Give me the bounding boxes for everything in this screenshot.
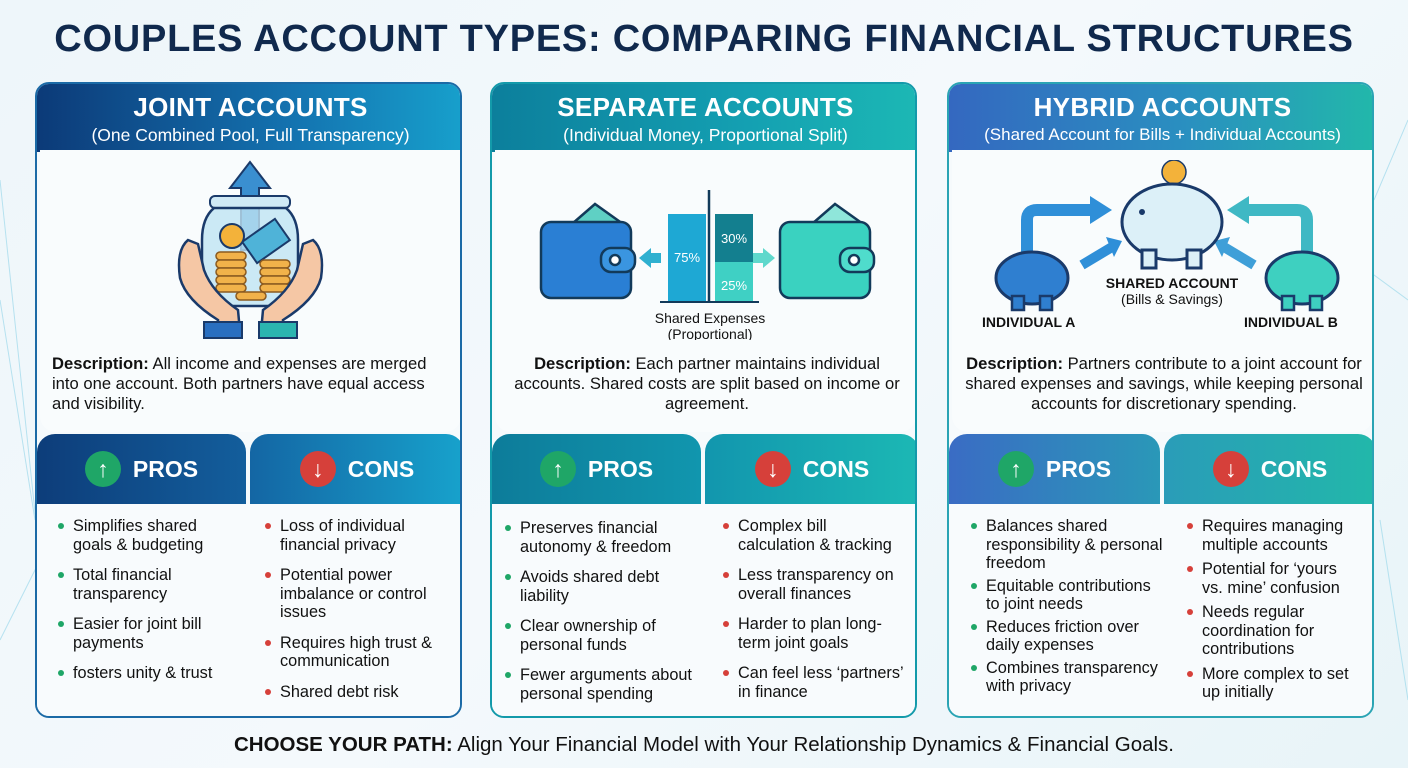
label: individual a: INDIVIDUAL A: [982, 314, 1075, 330]
list: separate cons: Harder to plan long-term joint goals: [738, 615, 882, 652]
list: joint pros: Simplifies shared goals & budgeting: [73, 517, 203, 554]
list: joint pros: [58, 517, 212, 682]
icon: jar with hands: [178, 160, 324, 339]
tab: hybrid pros: PROS: [1046, 456, 1111, 482]
list: separate cons: Can feel less ‘partners’ in finance: [738, 664, 903, 700]
diagram: piggy banks: SHARED ACCOUNT: [1106, 275, 1239, 291]
label: individual b: INDIVIDUAL B: [1244, 314, 1338, 330]
tab: separate cons: CONS: [803, 456, 869, 482]
tab: hybrid cons: CONS: [1261, 456, 1327, 482]
header: separate: (Individual Money, Proportional Split): [563, 125, 848, 145]
list: separate cons: [723, 517, 903, 700]
list: separate cons: Complex bill calculation & tracking: [738, 517, 892, 554]
list: separate cons: Less transparency on overall finances: [738, 566, 894, 602]
list: joint cons: [265, 517, 432, 700]
tab: joint cons: [250, 434, 464, 504]
header: joint: JOINT ACCOUNTS: [133, 92, 368, 122]
title: COUPLES ACCOUNT TYPES: COMPARING FINANCIAL STRUCTURES: [54, 18, 1354, 60]
list: joint pros: fosters unity & trust: [73, 664, 212, 682]
list: joint cons: Shared debt risk: [280, 682, 399, 700]
chart: wallets and proportional split: Shared Expenses: [655, 310, 765, 326]
description: hybrid: Description: Partners contribute to a joint account for shared expenses and savings, while keeping personal accounts for discretionary spending.: [965, 354, 1363, 413]
tab: separate cons: ↓: [767, 456, 779, 482]
list: joint cons: Loss of individual financial privacy: [280, 517, 405, 554]
header: separate: [492, 84, 919, 152]
description: separate: Description: Each partner maintains individual accounts. Shared costs are split based on income or agreement.: [514, 354, 900, 413]
list: separate pros: Preserves financial autonomy & freedom: [520, 519, 671, 556]
tab: joint cons: ↓: [312, 456, 324, 482]
chart: wallets and proportional split: 75%: [674, 250, 700, 265]
list: hybrid cons: Needs regular coordination for contributions: [1202, 603, 1314, 658]
diagram: piggy banks: [994, 160, 1340, 312]
diagram: piggy banks: (Bills & Savings): [1121, 291, 1223, 307]
list: separate pros: Avoids shared debt liability: [520, 568, 659, 604]
tab: hybrid pros: ↑: [1010, 456, 1022, 482]
header: joint: (One Combined Pool, Full Transparency): [91, 125, 410, 145]
header: hybrid: HYBRID ACCOUNTS: [1034, 92, 1291, 122]
list: hybrid cons: More complex to set up initially: [1202, 664, 1349, 701]
header: hybrid: [949, 84, 1376, 152]
tab: joint pros: ↑: [97, 456, 109, 482]
list: separate pros: Clear ownership of personal funds: [520, 617, 656, 654]
footer: CHOOSE YOUR PATH: Align Your Financial Model with Your Relationship Dynamics & Financial Goals.: [234, 733, 1174, 756]
chart: wallets and proportional split: 30%: [721, 231, 747, 246]
panel: joint accounts: [35, 82, 462, 718]
header: hybrid: (Shared Account for Bills + Individual Accounts): [984, 125, 1341, 144]
panel: separate accounts: [490, 82, 917, 718]
list: hybrid pros: Balances shared responsibility & personal freedom: [986, 517, 1162, 572]
list: joint cons: Requires high trust & communication: [280, 634, 432, 670]
tab: separate pros: [492, 434, 701, 504]
list: joint pros: Total financial transparency: [73, 566, 172, 602]
tab: hybrid cons: ↓: [1225, 456, 1237, 482]
list: hybrid cons: Requires managing multiple accounts: [1202, 517, 1343, 554]
tab: separate pros: PROS: [588, 456, 653, 482]
list: hybrid pros: Equitable contributions to joint needs: [986, 576, 1151, 613]
list: hybrid pros: [971, 517, 1162, 695]
tab: separate pros: ↑: [552, 456, 564, 482]
header: separate: SEPARATE ACCOUNTS: [557, 92, 854, 122]
list: joint pros: Easier for joint bill payments: [73, 615, 202, 652]
list: hybrid cons: Potential for ‘yours vs. mine’ confusion: [1202, 560, 1340, 596]
list: hybrid cons: [1187, 517, 1349, 701]
description: joint: Description: All income and expenses are merged into one account. Both partners have equal access and visibility.: [52, 354, 426, 413]
header: joint: [37, 84, 464, 152]
chart: wallets and proportional split: 25%: [721, 278, 747, 293]
tab: separate cons: [705, 434, 919, 504]
tab: hybrid cons: [1164, 434, 1376, 504]
list: hybrid pros: Reduces friction over daily expenses: [986, 618, 1139, 654]
tab: joint pros: PROS: [133, 456, 198, 482]
tab: joint pros: [37, 434, 246, 504]
panel: hybrid accounts: [947, 82, 1374, 718]
chart: wallets and proportional split: [540, 190, 876, 340]
list: joint cons: Potential power imbalance or control issues: [280, 566, 427, 621]
list: separate pros: [505, 519, 692, 702]
tab: joint cons: CONS: [348, 456, 414, 482]
list: separate pros: Fewer arguments about personal spending: [520, 666, 692, 702]
tab: hybrid pros: [949, 434, 1160, 504]
list: hybrid pros: Combines transparency with privacy: [986, 658, 1158, 695]
